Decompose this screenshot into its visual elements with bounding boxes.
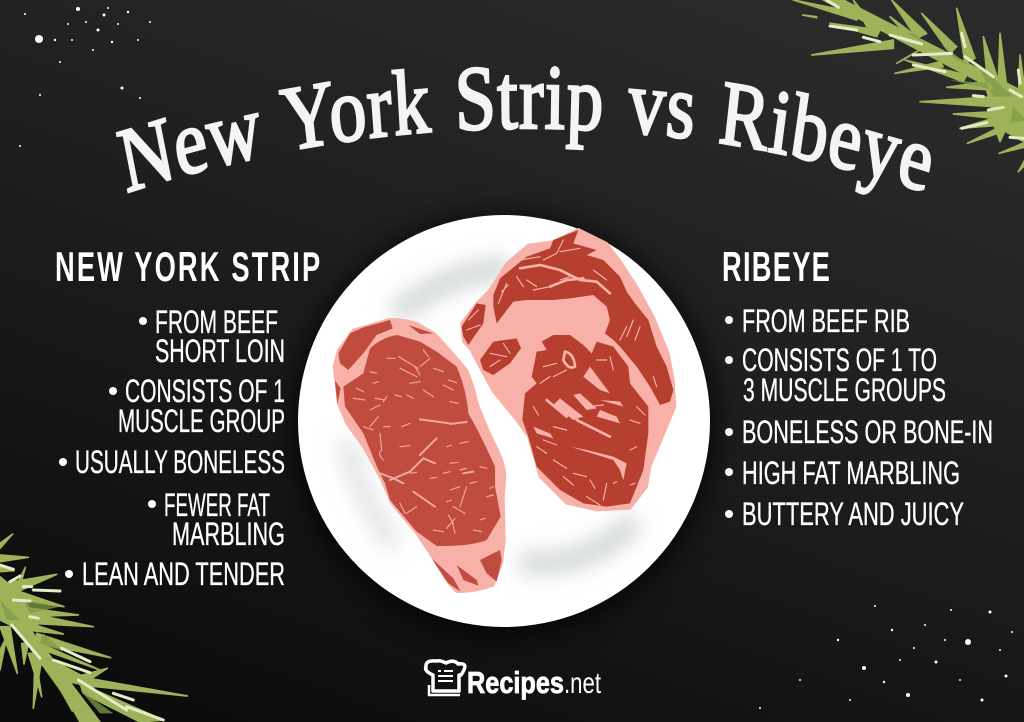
icon: rosemary sprig top right — [793, 0, 1024, 172]
steak: ribeye — [462, 229, 675, 510]
fact: lean and tender: LEAN AND TENDER — [82, 556, 285, 592]
fact: one muscle group: MUSCLE GROUP — [118, 403, 285, 439]
fact: from beef short loin: FROM BEEF — [155, 304, 278, 340]
heading: New York Strip: NEW YORK STRIP — [55, 243, 320, 290]
title: New York Strip vs Ribeye — [116, 66, 931, 195]
fact: lean and tender — [65, 556, 285, 592]
text: Recipes.net: .net — [564, 667, 601, 700]
fact: usually boneless — [59, 444, 285, 480]
icon: chef hat with book — [426, 661, 465, 695]
panel: New York Strip facts — [55, 243, 320, 592]
fact: fewer fat marbling: MARBLING — [172, 516, 285, 552]
fact: one muscle group: CONSISTS OF 1 — [125, 373, 285, 409]
splatter: bottom right — [759, 605, 1013, 709]
marbling patches — [533, 367, 627, 480]
fact: fewer fat marbling — [148, 487, 285, 552]
splatter: top left — [19, 7, 151, 147]
text: Recipes.net: Recipes — [467, 665, 564, 700]
fact: from beef short loin: SHORT LOIN — [155, 333, 285, 369]
fact: from beef rib: FROM BEEF RIB — [742, 303, 910, 339]
fact: from beef rib — [725, 303, 910, 339]
logo: Recipes.net — [426, 661, 601, 700]
fact: fewer fat marbling: FEWER FAT — [164, 487, 270, 523]
plate — [298, 215, 710, 627]
fact: from beef short loin — [139, 304, 285, 369]
heading: Ribeye: RIBEYE — [722, 243, 830, 290]
icon: rosemary sprig bottom left — [0, 534, 187, 722]
panel: Ribeye facts — [722, 243, 993, 532]
fact: one to three muscle groups — [725, 342, 946, 408]
fact: usually boneless: USUALLY BONELESS — [75, 444, 285, 480]
steak: New York strip — [334, 319, 505, 592]
fact: one muscle group — [109, 373, 285, 439]
